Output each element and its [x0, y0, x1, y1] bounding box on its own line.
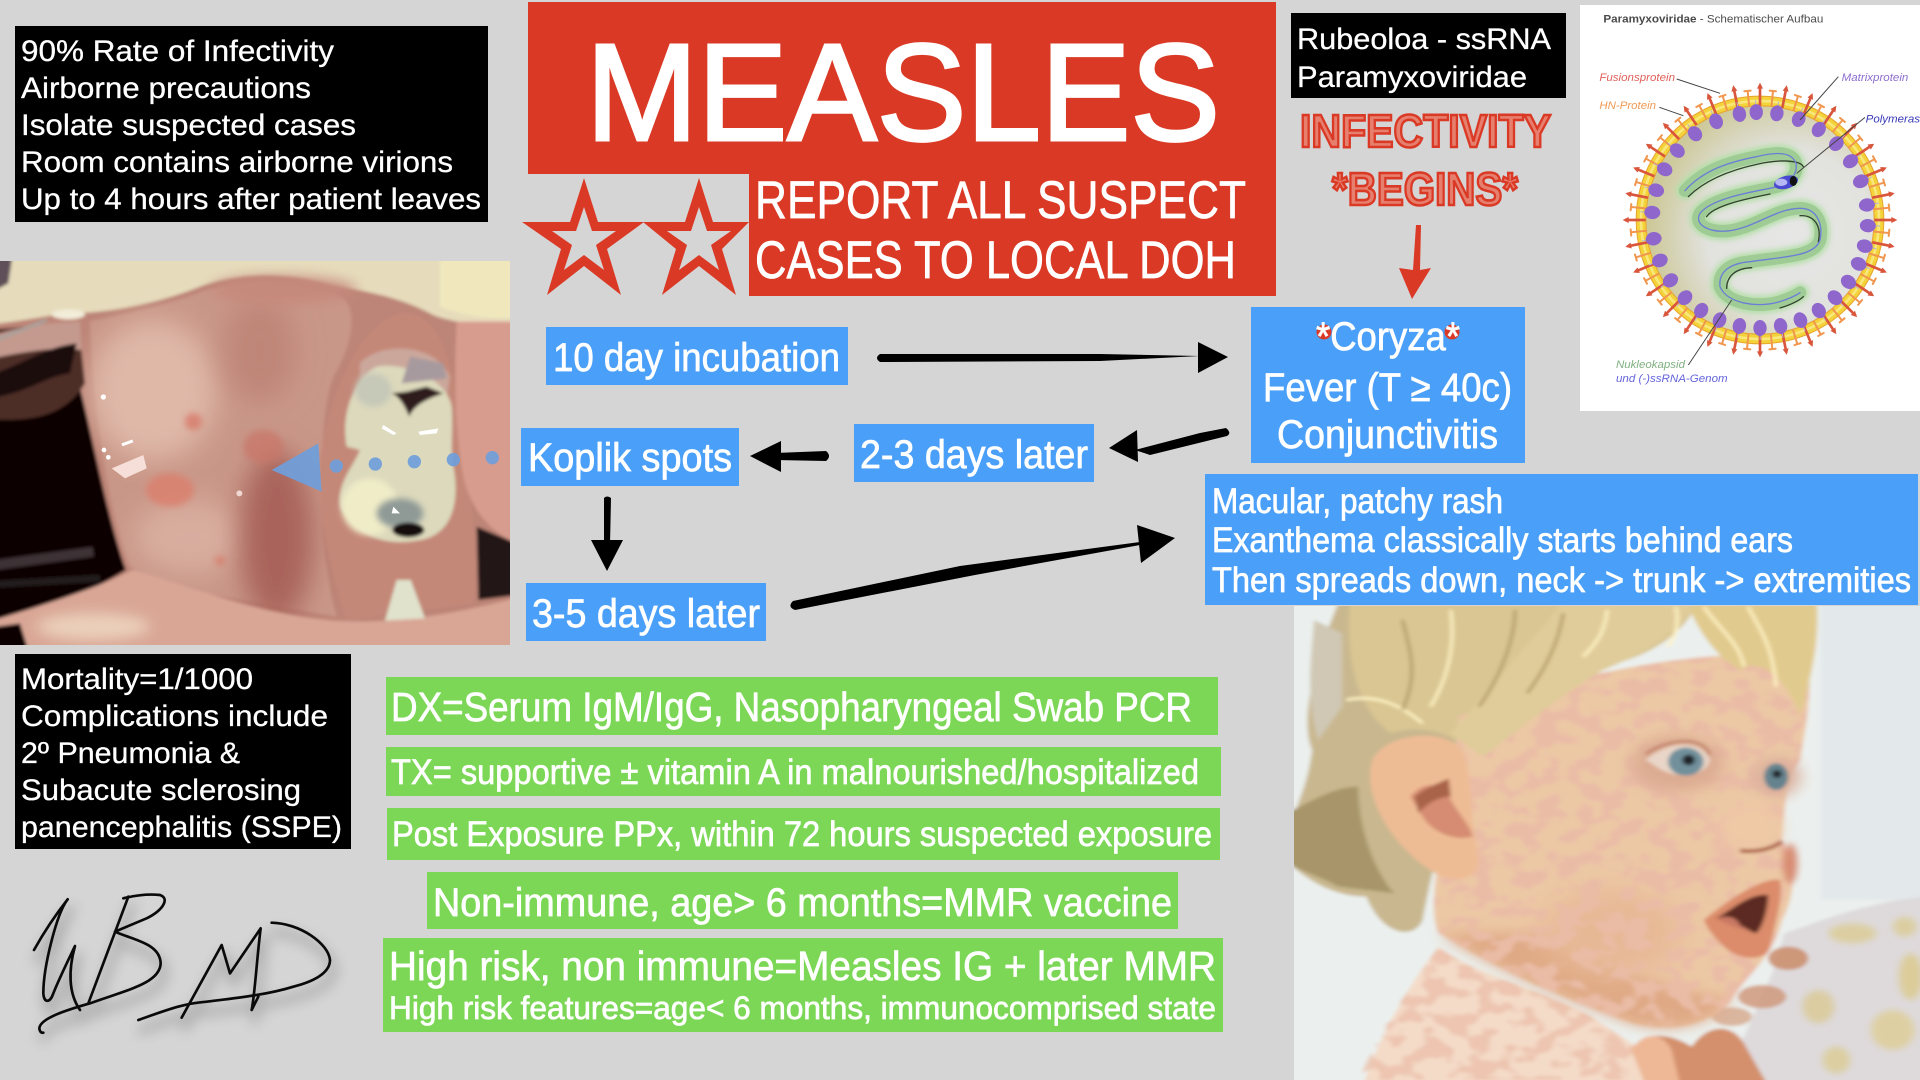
step: coryza fever conjunctivitis: Fever (T ≥ 40c)	[1263, 366, 1512, 410]
panel: post exposure prophylaxis: Post Exposure PPx, within 72 hours suspected exposure	[392, 815, 1212, 854]
panel: high risk immunoglobulin: High risk features=age< 6 months, immunocomprised state	[389, 990, 1216, 1026]
virion membrane	[1641, 101, 1879, 339]
arrow: blue pointer and dots	[272, 443, 499, 492]
rash mottling	[1435, 658, 1806, 1026]
virus part labels: Matrixprotein	[1842, 72, 1908, 84]
mouth	[1704, 880, 1781, 958]
photo: Koplik spots in mouth	[0, 261, 510, 645]
panel: MMR vaccine: Non-immune, age> 6 months=MMR vaccine	[433, 881, 1172, 925]
lower lip	[0, 570, 510, 645]
leader lines	[1659, 77, 1865, 365]
photo: child with measles rash	[1270, 593, 1920, 1080]
red Koplik patches	[146, 413, 283, 566]
panel: infectivity precautions: 90% Rate of Infectivity	[21, 35, 334, 68]
panel: rash description	[1205, 474, 1918, 605]
step: 10 day incubation: 10 day incubation	[553, 336, 840, 380]
panel: mortality and complications	[15, 654, 351, 849]
panel: treatment: TX= supportive ± vitamin A in malnourished/hospitalized	[391, 753, 1199, 792]
panel: mortality and complications: Complications include	[21, 700, 328, 733]
panel: mortality and complications: panencephalitis (SSPE)	[21, 811, 342, 844]
hand behind neck	[1712, 947, 1808, 1026]
arrow: coryza to 2-3 days	[1109, 428, 1229, 462]
panel: infectivity precautions	[15, 26, 488, 222]
eyes	[1632, 735, 1800, 797]
right cheek	[454, 320, 510, 542]
heading: infectivity begins: *BEGINS*	[1332, 163, 1518, 215]
arrow: 3-5 days to rash	[790, 525, 1175, 610]
highlights	[101, 394, 438, 513]
child's hand	[1632, 1029, 1776, 1080]
step: coryza fever conjunctivitis: Conjunctivitis	[1277, 413, 1498, 457]
panel: infectivity precautions: Airborne precautions	[21, 72, 311, 105]
arrow: incubation to coryza	[877, 342, 1228, 373]
panel: mortality and complications: Mortality=1/1000	[21, 663, 253, 696]
virus part labels: HN-Protein	[1599, 100, 1656, 112]
nose	[1720, 802, 1782, 852]
bangs	[1689, 606, 1820, 712]
label: virus classification: Rubeoloa - ssRNA	[1297, 23, 1551, 56]
panel: virus diagram	[1580, 5, 1920, 411]
callout: report suspect cases	[749, 171, 1276, 296]
label: virus classification: Paramyxoviridae	[1297, 61, 1527, 94]
step: 2-3 days later: 2-3 days later	[860, 433, 1088, 477]
step: coryza fever conjunctivitis	[1251, 307, 1525, 463]
virus part labels: Polymeras	[1866, 114, 1920, 126]
arrow: 2-3 days to Koplik spots	[750, 441, 829, 472]
virus title: Paramyxoviridae - Schematischer Aufbau	[1603, 14, 1823, 26]
callout: report suspect cases: CASES TO LOCAL DOH	[755, 231, 1236, 290]
arrow: Koplik spots to 3-5 days	[591, 496, 623, 571]
panel: rash description: Macular, patchy rash	[1212, 482, 1503, 521]
nucleocapsid	[1685, 153, 1821, 308]
label: virus classification	[1291, 13, 1566, 98]
heading: infectivity begins: INFECTIVITY	[1300, 105, 1551, 157]
step: coryza fever conjunctivitis: *Coryza*	[1316, 315, 1460, 359]
dark oral cavity	[0, 382, 126, 627]
hair back	[1294, 606, 1459, 934]
panel: infectivity precautions: Isolate suspected cases	[21, 109, 356, 142]
panel: high risk immunoglobulin	[383, 938, 1223, 1032]
neck and shoulder	[1364, 947, 1646, 1080]
patterned fabric	[1742, 897, 1920, 1080]
matrix proteins	[1640, 100, 1880, 340]
step: Koplik spots: Koplik spots	[528, 436, 732, 480]
arrow: red arrow to coryza	[1399, 225, 1431, 299]
tooth and gum	[323, 484, 332, 557]
step: 3-5 days later: 3-5 days later	[532, 592, 760, 636]
panel: infectivity precautions: Up to 4 hours after patient leaves	[21, 183, 481, 216]
polymerase	[1772, 173, 1800, 192]
title: MEASLES banner: MEASLES	[586, 16, 1220, 170]
panel: rash description: Exanthema classically starts behind ears	[1212, 521, 1793, 560]
virus part labels: Fusionsprotein	[1599, 72, 1675, 84]
panel: mortality and complications: Subacute sclerosing	[21, 774, 301, 807]
icon: two red stars	[522, 178, 749, 295]
panel: mortality and complications: 2º Pneumonia &	[21, 737, 240, 770]
virus part labels: und (-)ssRNA-Genom	[1616, 373, 1728, 385]
callout: report suspect cases: REPORT ALL SUSPECT	[755, 171, 1246, 230]
virus part labels: Nukleokapsid	[1616, 359, 1686, 371]
face	[1434, 655, 1809, 1028]
virus part labels	[1599, 72, 1920, 385]
panel: diagnosis: DX=Serum IgM/IgG, Nasopharyngeal Swab PCR	[391, 684, 1192, 730]
surface spike proteins	[1623, 83, 1897, 357]
panel: high risk immunoglobulin: High risk, non immune=Measles IG + later MMR	[389, 943, 1216, 989]
signature: WB MD	[34, 895, 333, 1038]
ear	[1370, 736, 1479, 879]
heading: infectivity begins	[1300, 105, 1551, 215]
panel: infectivity precautions: Room contains airborne virions	[21, 146, 453, 179]
